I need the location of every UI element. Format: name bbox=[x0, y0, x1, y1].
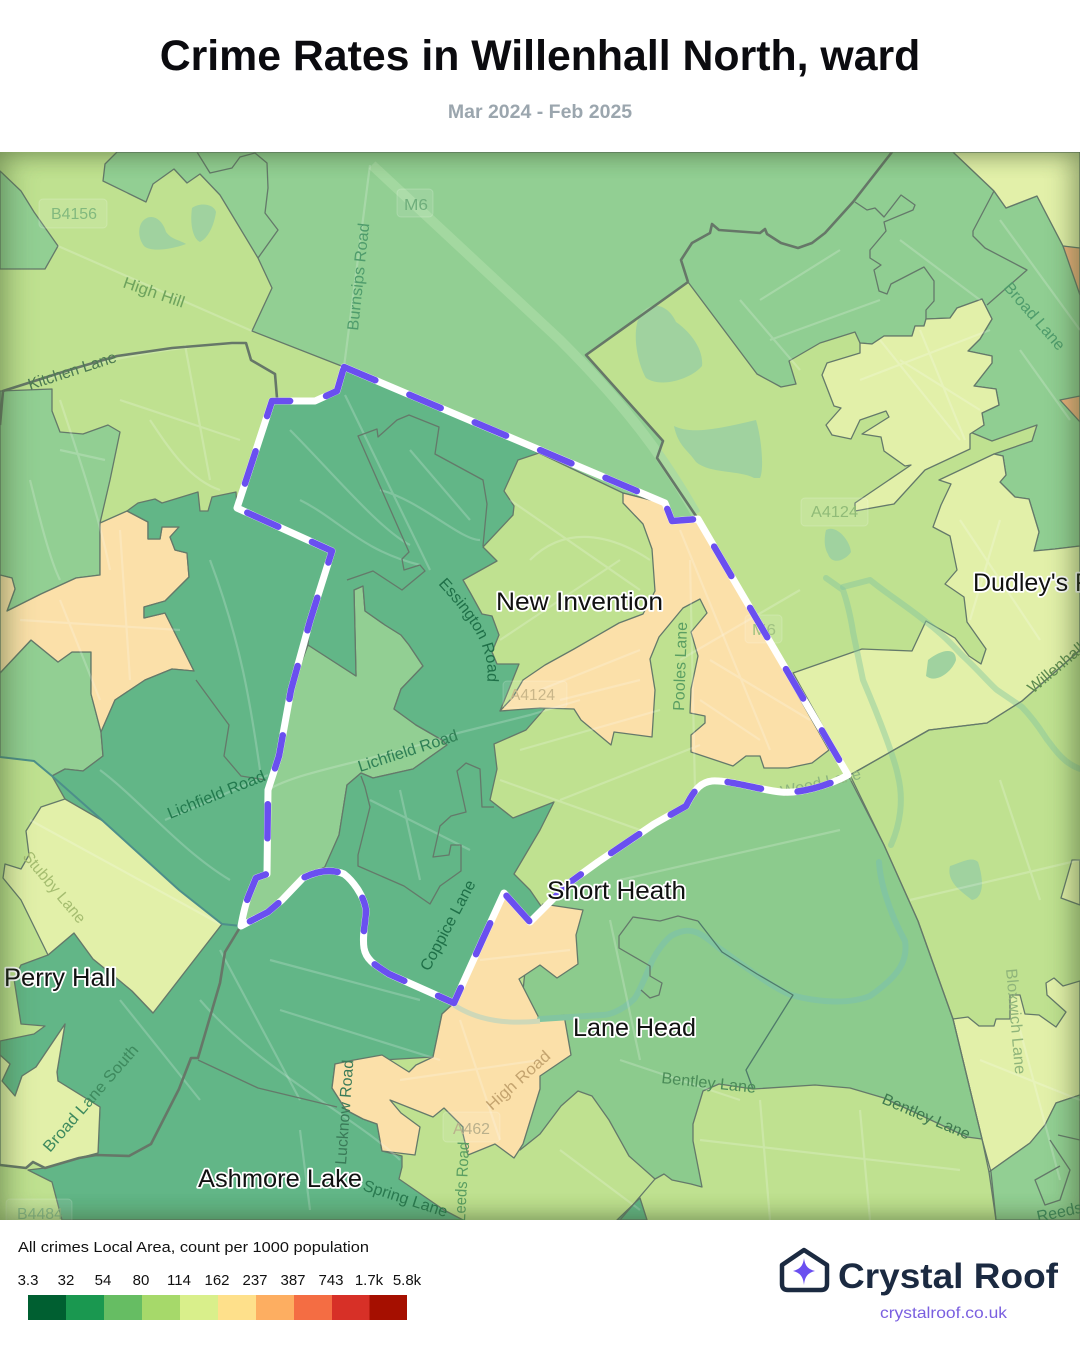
logo wordmark: Crystal Roof bbox=[838, 1257, 1058, 1296]
place Lane Head: Lane Head bbox=[573, 1014, 696, 1042]
area: north east mid green bbox=[681, 152, 1080, 551]
road label Essington Road: Essington Road bbox=[439, 578, 499, 682]
road label Bentley Lane east: Bentley Lane bbox=[879, 1091, 973, 1143]
place Short Heath: Short Heath bbox=[547, 877, 686, 905]
road label Stubby Lane: Stubby Lane bbox=[19, 849, 89, 927]
small lakes bbox=[825, 529, 982, 900]
lake east bbox=[674, 420, 762, 478]
shield M6 north bbox=[397, 189, 433, 217]
legend scale numbers: 32 bbox=[58, 1272, 74, 1289]
choropleth areas bbox=[0, 152, 1080, 1220]
line: ward dark interior bbox=[347, 415, 487, 590]
boundary M6 west bbox=[586, 282, 698, 519]
line: NE ward interior bbox=[855, 195, 934, 319]
road label Lichfield Road west: Lichfield Road bbox=[165, 768, 268, 823]
road label Bentley Lane west: Bentley Lane bbox=[661, 1070, 757, 1097]
road label Wood Lane: Wood Lane bbox=[779, 766, 863, 801]
shield A462 bbox=[443, 1112, 500, 1142]
area: orange corner two bbox=[1060, 396, 1080, 422]
line: south east patch bbox=[1035, 1135, 1080, 1205]
legend title: All crimes Local Area, count per 1000 population bbox=[18, 1239, 369, 1256]
estate streets north west bbox=[30, 345, 240, 580]
road label Leeds Road: Leeds Road bbox=[452, 1141, 473, 1220]
line: bottom left bbox=[0, 1165, 655, 1220]
lake cluster north west bbox=[139, 205, 216, 250]
road label High Hill: High Hill bbox=[121, 275, 187, 312]
road label A4124 centre: A4124 bbox=[510, 687, 555, 704]
east streets bbox=[120, 220, 1080, 1220]
shield and road labels bbox=[17, 197, 1080, 1220]
boundary north west bbox=[0, 343, 277, 425]
legend scale numbers: 387 bbox=[280, 1272, 306, 1289]
base layer: lime areas bbox=[0, 152, 1080, 1220]
legend scale numbers: 80 bbox=[133, 1272, 149, 1289]
road label Lucknow Road: Lucknow Road bbox=[333, 1059, 357, 1165]
road label Burnsips Road: Burnsips Road bbox=[345, 222, 373, 331]
legend scale numbers: 237 bbox=[242, 1272, 268, 1289]
place Ashmore Lake: Ashmore Lake bbox=[198, 1165, 362, 1193]
ward boundary bbox=[237, 367, 848, 1003]
legend and logo bbox=[18, 1239, 1058, 1322]
legend scale numbers: 1.7k bbox=[355, 1272, 384, 1289]
legend scale numbers: 3.3 bbox=[18, 1272, 38, 1289]
legend scale numbers: 162 bbox=[204, 1272, 230, 1289]
canals bbox=[540, 578, 1080, 1019]
motorway M6 bbox=[372, 165, 696, 514]
area: east pale estate bbox=[793, 454, 1080, 775]
shield B4484 bbox=[6, 1199, 72, 1225]
area: west dark green bbox=[52, 492, 332, 926]
area: Stubby Lane pale bbox=[3, 799, 222, 1013]
line: south west thin bbox=[198, 1060, 337, 1107]
place New Invention: New Invention bbox=[496, 588, 663, 616]
logo url: crystalroof.co.uk bbox=[880, 1305, 1008, 1322]
line: arc to south east bbox=[850, 775, 996, 1220]
line: dark interior west bbox=[196, 680, 266, 780]
peach streets bbox=[20, 530, 810, 1140]
boundary lines bbox=[0, 152, 1080, 1220]
area: ward mid green enclave bbox=[241, 586, 447, 926]
area: centre peach New Invention bbox=[500, 493, 829, 768]
area: north mid green bbox=[103, 152, 892, 522]
area: south west dark green bbox=[0, 871, 463, 1220]
legend colour swatches bbox=[28, 1295, 407, 1320]
area: south east corner mid green bbox=[989, 1095, 1080, 1220]
canal north east bbox=[826, 578, 901, 845]
legend scale numbers bbox=[18, 1272, 422, 1289]
line: south enclave bbox=[619, 916, 698, 998]
logo icon: house bbox=[782, 1250, 827, 1290]
area: small south mid green bbox=[617, 1198, 647, 1220]
area: orange corner one bbox=[1063, 246, 1080, 295]
area: ward dark green bbox=[237, 367, 554, 1003]
shield M6 east bbox=[745, 615, 782, 643]
line: south river loop bbox=[698, 921, 793, 1089]
area: north east pale estate bbox=[822, 299, 999, 511]
line: Broad Lane boundary bbox=[973, 191, 1027, 305]
road label Coppice Lane: Coppice Lane bbox=[418, 878, 480, 974]
legend scale numbers: 743 bbox=[318, 1272, 344, 1289]
shield B4156 bbox=[39, 199, 107, 228]
area: far east pale sliver bbox=[1061, 860, 1080, 905]
legend scale numbers: 5.8k bbox=[393, 1272, 422, 1289]
boundary south west bbox=[0, 929, 239, 1168]
shield A4124 east bbox=[801, 498, 868, 526]
legend scale numbers: 54 bbox=[95, 1272, 111, 1289]
line: east Wood Lane bbox=[850, 650, 1080, 775]
water features bbox=[139, 205, 982, 900]
area: top right pale bbox=[953, 152, 1080, 250]
map edge shading bbox=[0, 152, 1080, 1220]
road label Broad Lane north: Broad Lane bbox=[1000, 279, 1068, 354]
main roads bbox=[30, 165, 800, 1160]
area: south east pale bbox=[953, 978, 1080, 1172]
area: top left mid green bbox=[0, 171, 58, 269]
area: west mid green lower bbox=[0, 640, 103, 776]
area: south west pale bbox=[0, 1024, 100, 1168]
area: west mid green upper bbox=[0, 389, 120, 611]
lake north centre bbox=[636, 306, 702, 382]
canal east branch bbox=[843, 580, 1080, 769]
legend scale numbers: 114 bbox=[167, 1272, 191, 1289]
area: south peach High Road bbox=[332, 893, 583, 1158]
place names bbox=[4, 569, 1080, 1193]
map panel bbox=[0, 152, 1080, 1220]
road label Pooles Lane: Pooles Lane bbox=[671, 622, 691, 711]
area: west peach bbox=[0, 511, 194, 732]
ward outline white bbox=[237, 367, 848, 1003]
road label Broad Lane South: Broad Lane South bbox=[40, 1042, 142, 1156]
road label High Road: High Road bbox=[483, 1048, 554, 1114]
road label M6: M6 bbox=[404, 197, 428, 214]
road label A4124 east: A4124 bbox=[811, 504, 858, 521]
shield A4124 centre bbox=[503, 681, 567, 708]
ward streets bbox=[100, 395, 480, 880]
title: Crime Rates in Willenhall North, ward bbox=[160, 32, 920, 80]
road label A462: A462 bbox=[453, 1121, 490, 1138]
place Perry Hall: Perry Hall bbox=[4, 964, 116, 992]
road label Kitchen Lane: Kitchen Lane bbox=[26, 349, 119, 394]
canal south loop bbox=[540, 862, 906, 1019]
ward outline purple dashes bbox=[237, 367, 848, 1003]
boundary north bbox=[681, 152, 892, 282]
road label Lichfield Road east: Lichfield Road bbox=[356, 727, 460, 776]
line: dark ward south bbox=[358, 763, 494, 904]
road label Bloxwich Lane: Bloxwich Lane bbox=[1002, 968, 1028, 1075]
river line bbox=[0, 757, 241, 926]
road shields bbox=[6, 189, 868, 1225]
grey canal stub bbox=[454, 1005, 540, 1022]
road network bbox=[20, 165, 1080, 1220]
date subtitle: Mar 2024 - Feb 2025 bbox=[448, 101, 632, 123]
area: south mid green bbox=[520, 775, 982, 1187]
line: north notch boundary bbox=[197, 152, 278, 258]
road label B4156: B4156 bbox=[51, 206, 97, 223]
road label Spring Lane: Spring Lane bbox=[361, 1178, 450, 1220]
lime streets centre bbox=[500, 500, 700, 870]
thick borough boundaries bbox=[0, 152, 892, 1168]
road label M6 east: M6 bbox=[752, 622, 776, 639]
